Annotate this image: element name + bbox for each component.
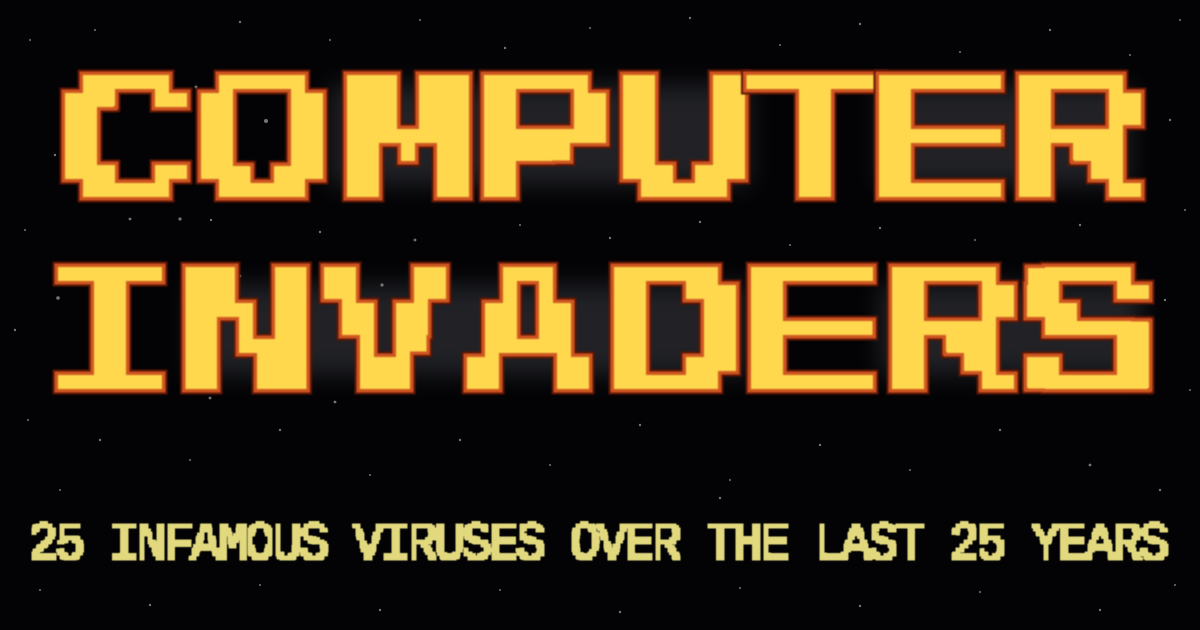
title: INVADERS: E: [736, 230, 888, 451]
title: COMPUTER: P: [469, 38, 621, 259]
title: COMPUTER: O: [183, 37, 341, 259]
title: COMPUTER: T: [747, 37, 883, 259]
title: INVADERS: I: [36, 228, 184, 451]
title: COMPUTER: [47, 36, 1152, 259]
title: INVADERS: D: [601, 228, 749, 451]
title: INVADERS: [36, 228, 1164, 452]
glow behind title: [190, 85, 1140, 375]
title: INVADERS: R: [882, 230, 1024, 452]
title: INVADERS: A: [462, 230, 594, 451]
subtitle: 25 INFAMOUS VIRUSES OVER THE LAST 25 YEARS: [28, 515, 1167, 576]
title: COMPUTER: M: [343, 36, 473, 259]
title: COMPUTER: C: [47, 37, 205, 259]
title: COMPUTER: U: [611, 38, 757, 259]
title: INVADERS: V: [319, 230, 451, 451]
title: INVADERS: S: [1012, 230, 1164, 451]
title: COMPUTER: E: [861, 37, 1019, 259]
title: INVADERS: N: [178, 229, 314, 451]
title: COMPUTER: R: [1008, 37, 1152, 259]
